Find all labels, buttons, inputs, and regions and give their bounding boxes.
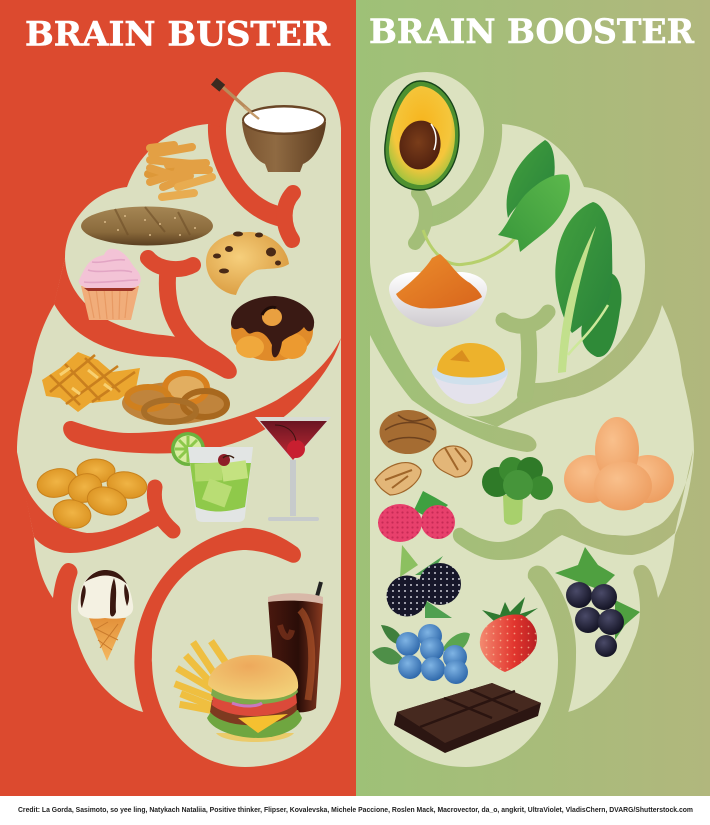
food: rice bowl with chopsticks [211, 78, 326, 172]
food: green cocktail with lime [171, 432, 253, 522]
food: chocolate donut [231, 296, 314, 361]
food: chard leaves [555, 202, 622, 373]
food: strawberry [480, 597, 538, 672]
title: brain buster: BRAIN BUSTER [25, 14, 331, 54]
food: chocolate bar [394, 683, 541, 753]
food: broccoli [482, 457, 553, 525]
food: eggs [564, 417, 674, 510]
food: blackberries [386, 545, 461, 618]
food: ice cream cone [78, 570, 133, 661]
food: tater tots [35, 459, 149, 532]
food: blackcurrants [555, 547, 640, 657]
left brain channels [17, 124, 341, 712]
food: burger [207, 655, 302, 742]
panel: brain booster [356, 0, 710, 796]
food: bitten cookie [206, 232, 289, 295]
food: whole walnut [380, 410, 436, 454]
food: french fries [178, 644, 232, 712]
food: onion rings [122, 373, 228, 424]
left brain silhouette [17, 72, 341, 767]
food: raspberries [378, 491, 455, 542]
panel: brain buster [0, 0, 356, 796]
right brain channels [370, 124, 693, 713]
food: mustard bowl [432, 343, 508, 404]
food: avocado half [385, 81, 459, 190]
food: cola glass with straw [268, 582, 323, 712]
food: spinach leaves [423, 140, 570, 265]
food: martini glass with cherry [255, 417, 331, 521]
title: brain booster: BRAIN BOOSTER [369, 12, 695, 52]
food: turmeric powder bowl [389, 254, 487, 327]
food: cupcake [79, 249, 141, 320]
food: penne pasta [148, 145, 212, 197]
food: waffle fries [42, 352, 140, 412]
food: bread loaf [81, 206, 213, 246]
food: blueberries [372, 624, 470, 684]
food: walnut halves [375, 446, 472, 495]
right brain silhouette [370, 72, 694, 767]
